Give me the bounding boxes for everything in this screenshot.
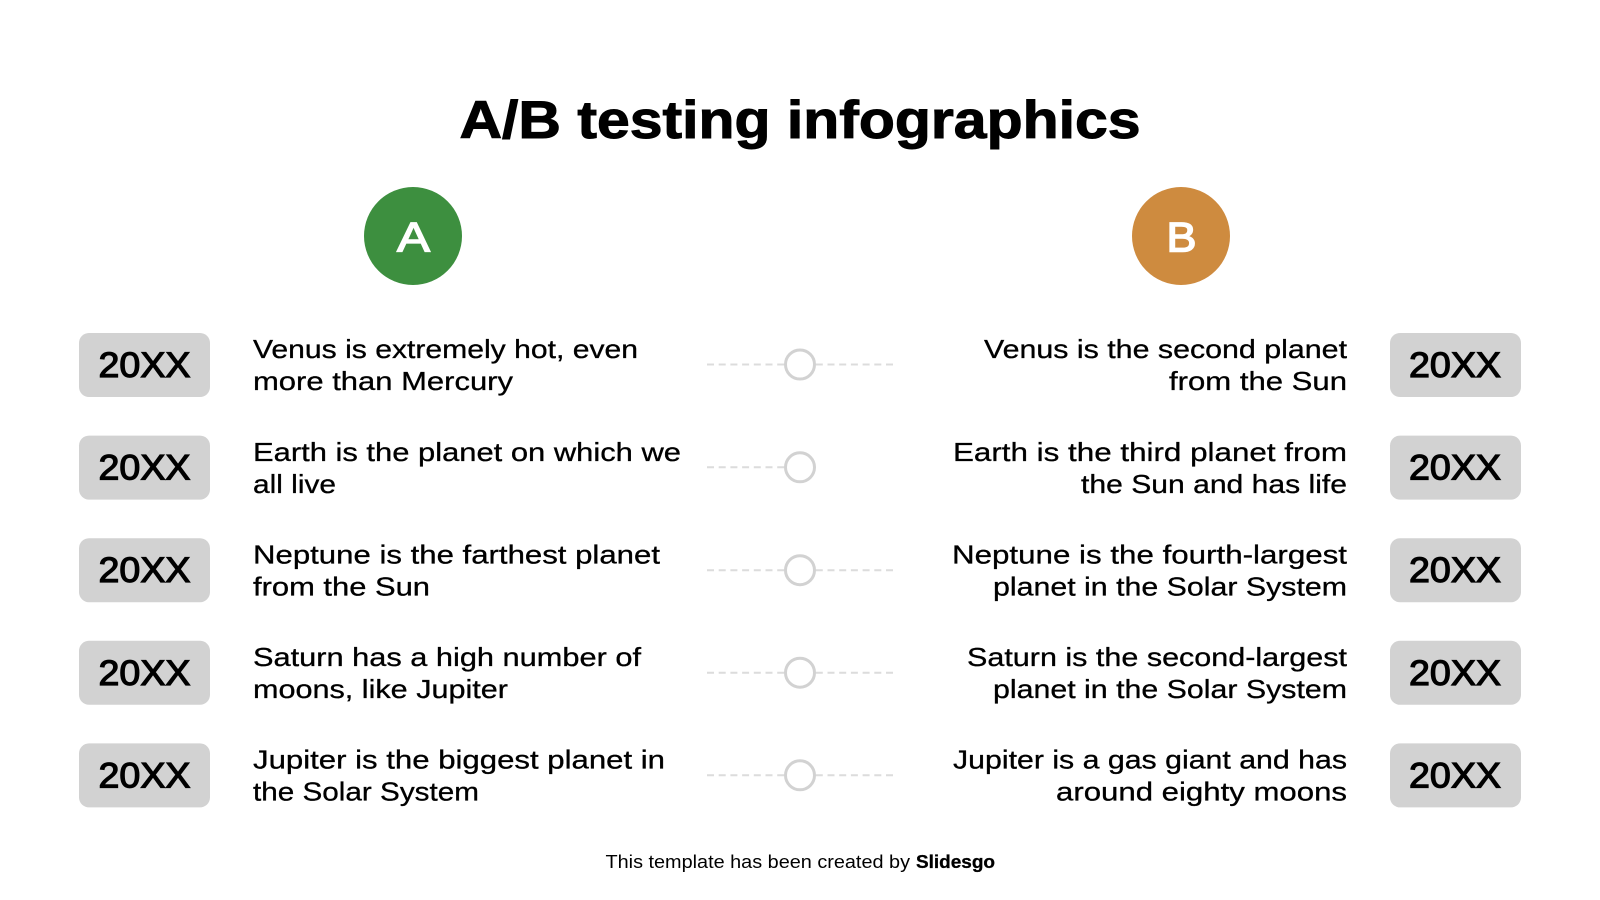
description [984,334,1348,396]
description: Neptune is the farthest planet [253,540,661,570]
connector 4 [707,658,893,687]
footer credit: Slidesgo [916,852,995,872]
description: from the Sun [253,571,430,601]
row: A1 [79,333,638,397]
description: the Solar System [253,776,479,806]
connector 3 [707,556,893,585]
row: A5 [79,743,665,807]
panel: option A [79,187,681,807]
year badge [1390,538,1521,602]
description: Venus is extremely hot, even [253,334,638,364]
icon: A badge [364,187,462,285]
title: A/B testing infographics [460,91,1140,150]
year badge: 20XX [1409,346,1501,385]
panel: connectors [707,350,893,790]
connector 5 [707,761,893,790]
row: A4 [79,641,642,705]
connector 2 [707,453,814,482]
description [253,437,681,499]
year badge: 20XX [1409,551,1501,590]
description: Earth is the third planet from [953,437,1347,467]
year badge: 20XX [1409,449,1501,488]
description [253,744,665,806]
year badge: 20XX [1409,756,1501,795]
description [952,540,1348,601]
description: Saturn is the second-largest [967,642,1348,672]
year badge [1390,743,1521,807]
description: Jupiter is the biggest planet in [253,744,665,774]
description [967,642,1348,704]
description: planet in the Solar System [993,674,1347,704]
year badge [1390,436,1521,500]
description: Venus is the second planet [984,334,1348,364]
year badge [79,641,210,705]
year badge [79,538,210,602]
year badge [79,743,210,807]
icon: A badge: A [397,214,430,260]
year badge: 20XX [98,449,190,488]
description: moons, like Jupiter [253,674,508,704]
description: Saturn has a high number of [253,642,642,672]
year badge: 20XX [98,654,190,693]
row: B5 [953,743,1521,807]
description: more than Mercury [253,366,513,396]
description: planet in the Solar System [993,571,1347,601]
description: the Sun and has life [1081,469,1347,499]
year badge: 20XX [98,756,190,795]
description: Neptune is the fourth-largest [952,540,1348,570]
row: A2 [79,436,681,500]
row: B2 [953,436,1521,500]
connector 1 [707,350,893,379]
row: B4 [967,641,1521,705]
description: Earth is the planet on which we [253,437,681,467]
row: B1 [984,333,1521,397]
description [253,642,642,704]
description [253,334,638,396]
description [953,744,1347,806]
footer credit: This template has been created by [606,852,910,872]
year badge [79,436,210,500]
icon: B badge [1132,187,1230,285]
year badge: 20XX [98,346,190,385]
row: A3 [79,538,661,602]
description [953,437,1347,499]
year badge [79,333,210,397]
description: around eighty moons [1056,776,1347,806]
icon: B badge: B [1166,214,1196,260]
description: all live [253,469,336,499]
panel: option B [952,187,1521,807]
description: Jupiter is a gas giant and has [953,744,1347,774]
year badge: 20XX [98,551,190,590]
description [253,540,661,601]
description: from the Sun [1169,366,1347,396]
year badge [1390,333,1521,397]
year badge: 20XX [1409,654,1501,693]
year badge [1390,641,1521,705]
row: B3 [952,538,1521,602]
